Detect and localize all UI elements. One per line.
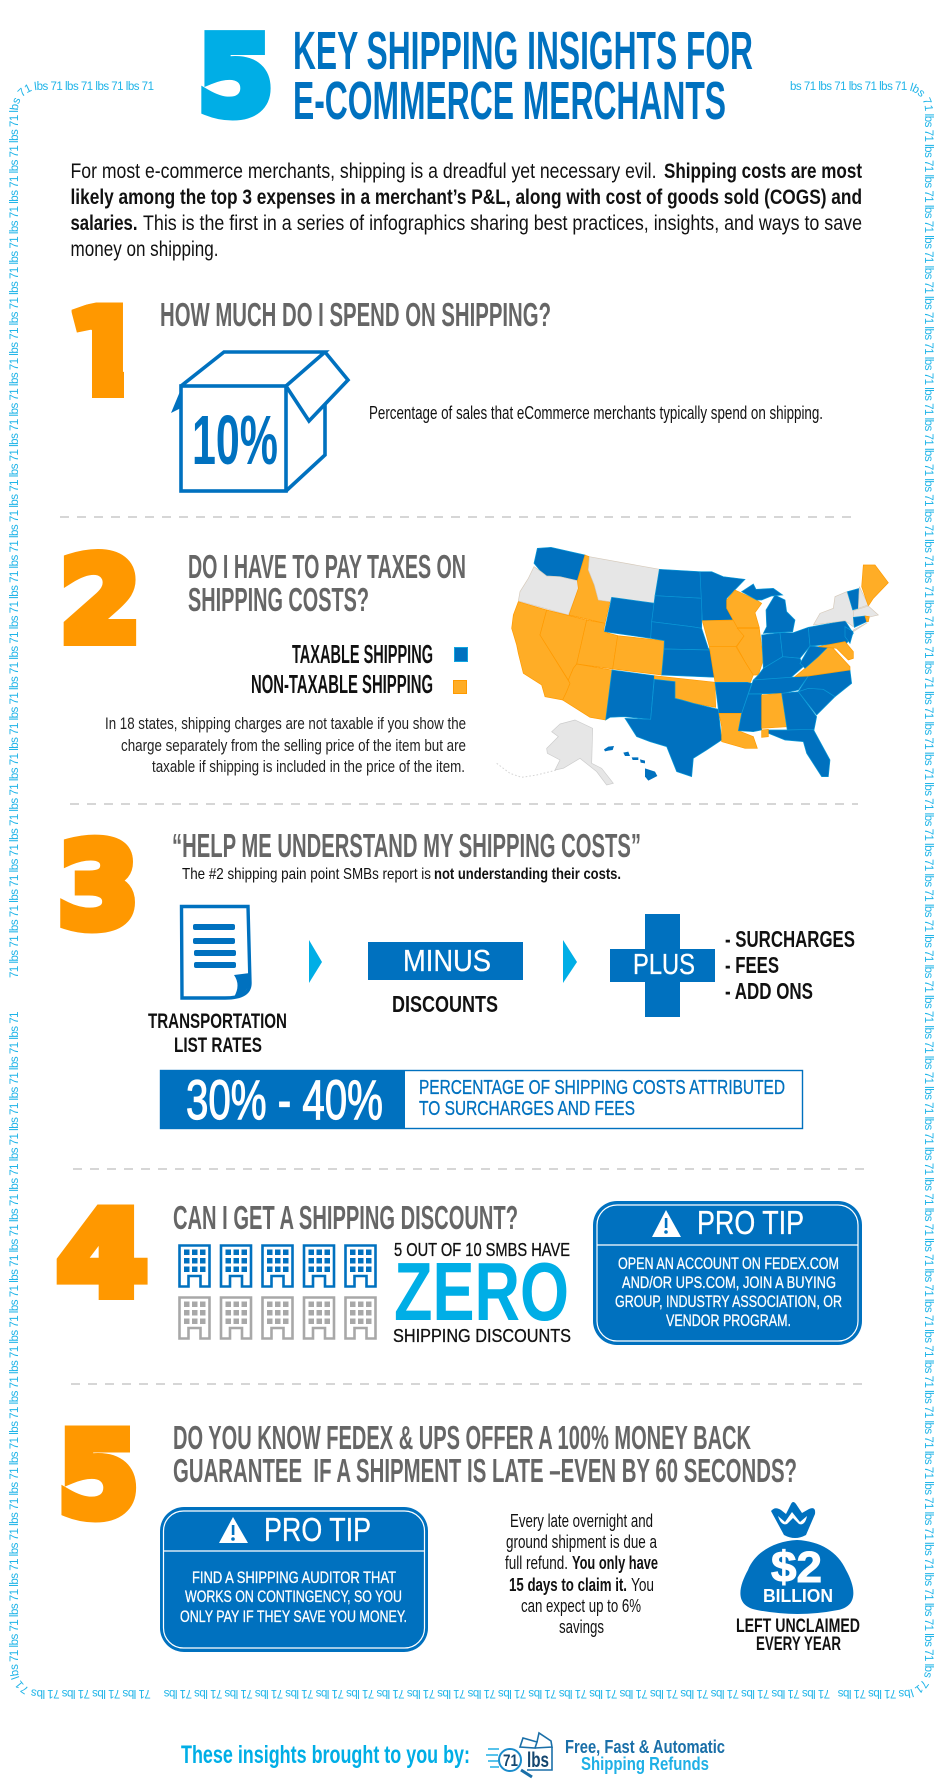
map: US states taxability [497,547,888,785]
label: transportation list rates: LIST RATES [174,1034,262,1057]
sub text [182,866,621,883]
logo: 71 lbs: lbs [527,1749,549,1772]
heading 3: “HELP ME UNDERSTAND MY SHIPPING COSTS” [172,827,641,864]
intro paragraph: Shipping costs are most [664,160,862,183]
late shipment text: 15 days to claim it. [509,1575,627,1595]
legend [251,639,468,699]
panel: section 5 money back guarantee [58,1408,860,1655]
label: left unclaimed every year: EVERY YEAR [756,1634,841,1655]
icon: money bag $2 billion: BILLION [763,1586,833,1606]
callout: pro tip 1: AND/OR UPS.COM, JOIN A BUYING [622,1273,836,1292]
numeral 2: 2 [60,534,141,668]
late shipment text: You [631,1575,654,1595]
plus shape: PLUS [633,949,695,981]
tax explanation text: In 18 states, shipping charges are not taxable if you show the [105,714,466,733]
heading 2 [188,548,466,618]
heading 5 [173,1419,797,1489]
stat bar 30% - 40%: PERCENTAGE OF SHIPPING COSTS ATTRIBUTED [419,1077,785,1099]
logo tagline: Free, Fast & Automatic [565,1737,725,1757]
stat bar 30% - 40%: TO SURCHARGES AND FEES [419,1098,635,1120]
logo tagline: Shipping Refunds [581,1754,709,1774]
big numeral 5: 5 [198,15,273,140]
minus box: MINUS [403,943,491,978]
panel: section 4 discount [57,1188,862,1346]
callout: pro tip 1 [593,1201,862,1345]
stat bar 30% - 40% [160,1068,802,1131]
intro paragraph: For most e-commerce merchants, shipping is a dreadful yet necessary evil. [70,160,656,183]
list: surcharges fees add ons: - SURCHARGES [725,926,855,952]
heading 2: SHIPPING COSTS? [188,581,369,618]
sub text: The #2 shipping pain point SMBs report is [182,866,431,883]
stat: 5 out of 10 zero discounts: 5 OUT OF 10 SMBS HAVE [394,1240,570,1260]
callout: pro tip 1: VENDOR PROGRAM. [666,1311,791,1330]
numeral 5: 5 [58,1408,139,1544]
callout: pro tip 2: WORKS ON CONTINGENCY, SO YOU [185,1587,402,1606]
label: left unclaimed every year [736,1616,860,1655]
arrow 2 [563,940,577,983]
icon: open box with 10%: 10% [192,401,278,479]
stat: 5 out of 10 zero discounts: SHIPPING DISCOUNTS [393,1326,571,1346]
intro paragraph [70,160,862,261]
list: surcharges fees add ons: - ADD ONS [725,978,813,1004]
callout: pro tip 1: PRO TIP [697,1204,804,1241]
intro paragraph: money on shipping. [70,238,218,261]
numeral 4: 4 [57,1188,147,1323]
minus box [368,942,523,980]
tax explanation text: taxable if shipping is included in the price of the item. [152,757,465,776]
sub text: not understanding their costs. [434,866,621,883]
legend: NON-TAXABLE SHIPPING [251,669,433,699]
label: transportation list rates: TRANSPORTATION [148,1010,287,1033]
decorative border: repeating 71 lbs text: bs 71 lbs 71 lbs 71 lbs 71 lbs 71 lbs 71 lbs 71 lbs 71 lbs 71 lbs 71 lbs 71 lbs 71 lbs 71 lbs 71 lbs 71 lbs 71 lbs 71 lbs 71 lbs 71 lbs 71 lbs 71 lbs 71 lbs 71 lbs 71 lbs 71 lbs 71 lbs 71 lbs 71 lbs 71 lbs 71 lbs 71 lbs 71 lbs 71 lbs 71 lbs 71 lbs 71 lbs 71 lbs 71 lbs 71 lbs 71 lbs 71 lbs 71 lbs 71 lbs 71 lbs 71 lbs 71 lbs 71 lbs 71 lbs 71 lbs 71 lbs 71 lbs 71 lbs 71 lbs 71 lbs 71 lbs 71 lbs 71 lbs 71 lbs 71 lbs 71 lbs 71 lbs 71 lbs 71 lbs 71 lbs 71 lbs 71 lbs 71 lbs 71 lbs 71 lbs 71 lbs 71 lbs 71 lbs 71 lbs 71 lbs 71 lbs 71 lbs 71 lbs 71 lbs 71 lbs 71 lbs 71 lbs 71 lbs 71 lbs 71 lbs 71 lbs 71 lbs 71 lbs 71 lbs 71 lbs 71 lbs 71 lbs 71 lbs 71 lbs 71 lbs 71 lbs 71 lbs 71 lbs 71 lbs 71 lbs 71 lbs 71 lbs 71 lbs 71 lbs 71 lbs 71 lbs 71 lbs 71 lbs 71 [9,81,934,1699]
label: transportation list rates [148,1010,287,1057]
decorative border: repeating 71 lbs text: 71 lbs 71 lbs 71 lbs 71 lbs 71 lbs 71 lbs 71 lbs 71 lbs 71 lbs 71 lbs 71 lbs 71 lbs 71 lbs 71 lbs 71 lbs 71 lbs 71 lbs 71 lbs 71 lbs 71 lbs 71 lbs 71 lbs 71 lbs 71 lbs 71 lbs 71 lbs 71 lbs 71 lbs 71 lbs 71 lbs 71 lbs 71 lbs 71 lbs 71 [9,81,154,978]
numeral 1: 1 [64,286,145,420]
callout: pro tip 2 [160,1507,428,1652]
panel: section 3 understanding costs [58,820,855,1131]
title block [198,15,753,140]
legend: TAXABLE SHIPPING [292,639,433,669]
late shipment text: Every late overnight and [510,1511,653,1531]
icon: document [182,906,250,998]
arrow 1 [309,940,322,983]
callout: pro tip 2: ONLY PAY IF THEY SAVE YOU MONEY. [180,1607,407,1626]
numeral 3: 3 [58,820,139,954]
logo: 71 lbs: 71 [503,1751,518,1770]
callout: pro tip 1: GROUP, INDUSTRY ASSOCIATION, OR [615,1292,842,1311]
callout: pro tip 2: FIND A SHIPPING AUDITOR THAT [192,1568,396,1587]
icon: buildings grey row [180,1298,376,1338]
late shipment text: You only have [572,1553,658,1573]
list: surcharges fees add ons: - FEES [725,952,779,978]
callout: pro tip 2: PRO TIP [264,1511,371,1548]
tax explanation text: charge separately from the selling price of the item but are [121,736,466,755]
panel: section 2 taxes [60,534,888,785]
icon: money bag $2 billion [740,1502,853,1614]
icon: open box with 10% [171,352,348,491]
late shipment text: savings [559,1617,604,1637]
label: discounts: DISCOUNTS [392,991,498,1017]
footer [181,1733,725,1777]
late shipment text: full refund. [505,1553,568,1573]
intro paragraph: salaries. [70,212,138,235]
late shipment text: can expect up to 6% [521,1596,641,1616]
label: left unclaimed every year: LEFT UNCLAIMED [736,1616,860,1637]
panel: section 1 shipping spend [64,286,823,491]
footer tagline: These insights brought to you by: [181,1741,470,1769]
stat: 5 out of 10 zero discounts [393,1240,571,1346]
callout: pro tip 1: OPEN AN ACCOUNT ON FEDEX.COM [618,1254,839,1273]
tax explanation text [105,714,466,776]
heading 2: DO I HAVE TO PAY TAXES ON [188,548,466,585]
icon: buildings blue row [180,1246,376,1286]
logo: 71 lbs [486,1733,552,1777]
heading 4: CAN I GET A SHIPPING DISCOUNT? [173,1199,518,1236]
heading 1: HOW MUCH DO I SPEND ON SHIPPING? [160,296,551,333]
logo tagline [565,1737,725,1774]
late shipment text: ground shipment is due a [506,1532,658,1552]
icon: money bag $2 billion: $2 [771,1543,822,1592]
stat: 5 out of 10 zero discounts: ZERO [394,1245,569,1338]
list: surcharges fees add ons [725,926,855,1004]
stat bar 30% - 40%: 30% - 40% [186,1068,383,1131]
plus shape [610,914,715,1017]
late shipment text [505,1511,658,1637]
